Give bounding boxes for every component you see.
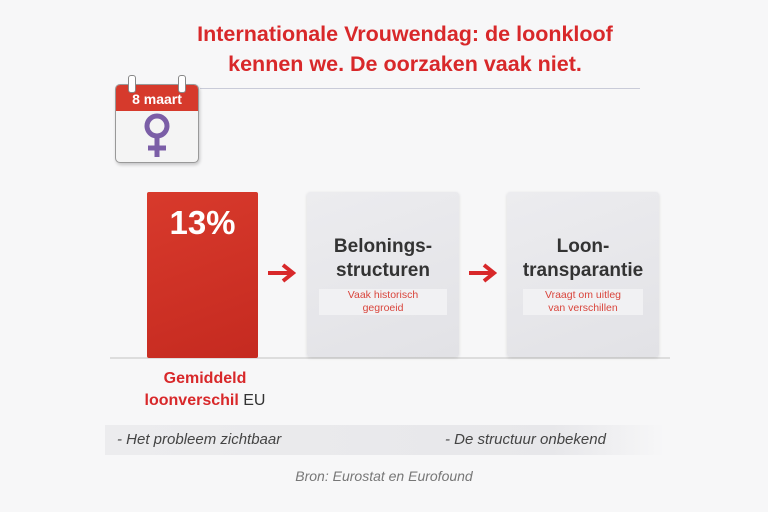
panel: belonings: gegroeid	[363, 302, 403, 314]
panel: loontransparantie: transparantie	[523, 260, 643, 281]
footer bar	[105, 425, 665, 455]
panel: loontransparantie: van verschillen	[548, 302, 618, 314]
label: gemiddeld: loonverschil EU	[145, 392, 265, 409]
source: Bron: Eurostat en Eurofound	[295, 468, 473, 484]
panel: belonings	[307, 192, 459, 357]
icon: calendar	[114, 75, 202, 166]
panel: belonings: Belonings-	[334, 236, 432, 257]
panel: 13%	[147, 192, 258, 358]
title	[197, 22, 613, 76]
footer bar: - Het probleem zichtbaar	[117, 431, 281, 448]
panel: loontransparantie: Loon-	[557, 236, 609, 257]
panel: loontransparantie: Vraagt om uitleg	[545, 289, 621, 301]
label: gemiddeld	[145, 370, 265, 409]
title: kennen we. De oorzaken vaak niet.	[228, 52, 582, 76]
panel: belonings: Vaak historisch	[348, 289, 418, 301]
panel: 13%: 13%	[169, 204, 236, 241]
footer bar: - De structuur onbekend	[445, 431, 606, 448]
arrow 1	[268, 264, 296, 282]
arrow 2	[469, 264, 497, 282]
title: Internationale Vrouwendag: de loonkloof	[197, 22, 613, 46]
icon: calendar: 8 maart	[132, 91, 182, 107]
label: gemiddeld: Gemiddeld	[164, 370, 246, 387]
panel: belonings: structuren	[336, 260, 430, 281]
panel: loontransparantie	[507, 192, 659, 357]
